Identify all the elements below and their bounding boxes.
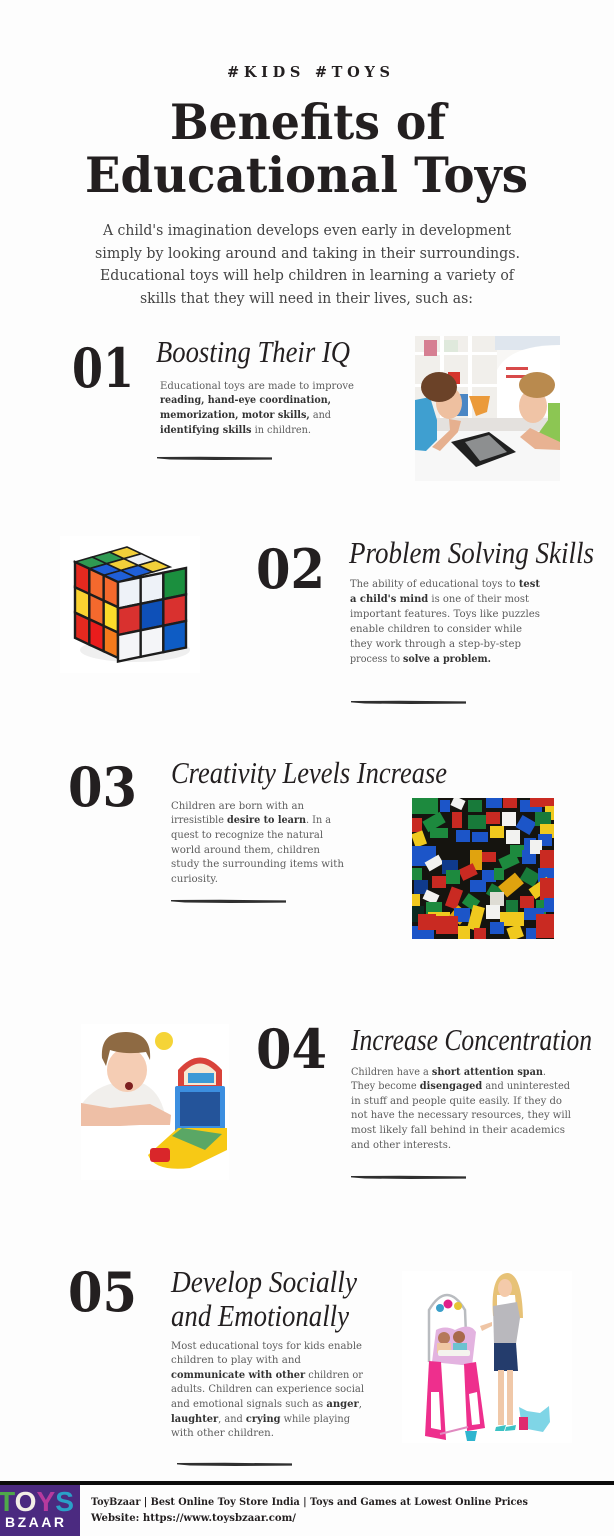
body text 05: laughter, and crying while playing — [171, 1413, 350, 1425]
body text 05: Most educational toys for kids enable — [171, 1340, 362, 1352]
brush stroke divider — [171, 900, 286, 903]
body text 03: world around them, children — [171, 844, 320, 856]
body text 02: they work through a step-by-step — [350, 638, 521, 650]
footer text: ToyBzaar | Best Online Toy Store India | Toys and Games at Lowest Online Prices — [91, 1496, 528, 1508]
body text 01: Educational toys are made to improve — [160, 380, 354, 392]
body text 04: in stuff and people quite easily. If they do — [351, 1095, 562, 1107]
title: Educational Toys — [85, 146, 528, 204]
panel: section 01 — [72, 334, 560, 481]
panel: section 02 — [60, 535, 594, 704]
intro paragraph: A child's imagination develops even early in development — [102, 222, 511, 239]
body text 02: enable children to consider while — [350, 623, 522, 635]
footer bar rule — [0, 1481, 614, 1485]
body text 01 — [160, 380, 354, 436]
brush stroke divider — [351, 701, 466, 704]
photo: boys playing chess — [415, 336, 560, 481]
title — [85, 93, 528, 204]
number 04: 04 — [256, 1017, 327, 1081]
heading: Develop Socially and Emotionally: Develop Socially — [170, 1264, 357, 1299]
footer text: Website: https://www.toysbzaar.com/ — [90, 1512, 296, 1524]
body text 02: important features. Toys like puzzles — [350, 608, 540, 620]
brush stroke divider — [351, 1176, 466, 1179]
panel: section 03 — [68, 755, 554, 941]
body text 04 — [351, 1066, 572, 1151]
body text 03: irresistible desire to learn. In a — [171, 814, 332, 826]
body text 05: communicate with other children or — [171, 1369, 364, 1381]
number 02: 02 — [256, 537, 325, 601]
body text 03: study the surrounding items with — [171, 858, 344, 870]
body text 01: identifying skills in children. — [160, 424, 311, 436]
intro paragraph: Educational toys will help children in learning a variety of — [100, 267, 516, 284]
body text 04: most likely fall behind in their academics — [351, 1124, 565, 1136]
body text 02: a child's mind is one of their most — [350, 593, 530, 605]
body text 05: with other children. — [171, 1427, 274, 1439]
heading: Develop Socially and Emotionally — [170, 1264, 357, 1333]
body text 02: process to solve a problem. — [350, 653, 491, 665]
logo: Toys Bzaar: TOYS — [0, 1486, 74, 1517]
body text 05: children to play with and — [171, 1354, 301, 1366]
body text 03 — [171, 800, 344, 885]
logo: Toys Bzaar — [0, 1485, 80, 1536]
photo: Rubik's cube — [60, 536, 200, 673]
hashtag line: #KIDS #TOYS — [227, 64, 390, 81]
title: Benefits of — [170, 93, 449, 151]
body text 04: Children have a short attention span. — [351, 1066, 546, 1078]
heading: Creativity Levels Increase: Creativity Levels Increase — [171, 755, 447, 790]
intro paragraph — [95, 222, 520, 307]
left boy — [415, 397, 437, 451]
heading: Boosting Their IQ: Boosting Their IQ — [156, 334, 350, 369]
body text 05: adults. Children can experience social — [171, 1383, 365, 1395]
number 05: 05 — [68, 1260, 137, 1324]
body text 04: They become disengaged and uninterested — [351, 1080, 570, 1092]
icon: speech bubble — [155, 1032, 173, 1050]
right boy — [530, 403, 560, 445]
brush stroke divider — [177, 1463, 292, 1466]
heading: Develop Socially and Emotionally: and Emotionally — [171, 1298, 349, 1333]
intro paragraph: simply by looking around and taking in their surroundings. — [95, 245, 520, 262]
chess board — [451, 432, 516, 467]
body text 03: Children are born with an — [171, 800, 304, 812]
body text 05 — [171, 1340, 365, 1439]
panel: section 04 — [81, 1017, 592, 1180]
body text 04: not have the necessary resources, they will — [351, 1109, 572, 1121]
photo: surprised boy and connect-four toy — [81, 1024, 229, 1180]
photo: pile of building bricks — [411, 796, 554, 941]
number 03: 03 — [68, 755, 137, 819]
body text 03: curiosity. — [171, 873, 218, 885]
body text 02 — [350, 578, 540, 665]
brush stroke divider — [157, 457, 272, 460]
panel: section 05 — [68, 1260, 572, 1466]
body text 02: The ability of educational toys to test — [350, 578, 540, 590]
logo: Toys Bzaar: BZAAR — [5, 1514, 64, 1530]
photo: doll with twin high chair — [402, 1271, 572, 1443]
footer text — [90, 1496, 528, 1524]
intro paragraph: skills that they will need in their lives, such as: — [140, 290, 473, 307]
body text 01: reading, hand-eye coordination, — [160, 394, 331, 406]
body text 04: and other interests. — [351, 1139, 451, 1151]
body text 03: quest to recognize the natural — [171, 829, 324, 841]
number 01: 01 — [72, 336, 134, 400]
toy — [178, 1058, 222, 1087]
body text 05: and emotional signals such as anger, — [171, 1398, 362, 1410]
body text 01: memorization, motor skills, and — [160, 409, 331, 421]
